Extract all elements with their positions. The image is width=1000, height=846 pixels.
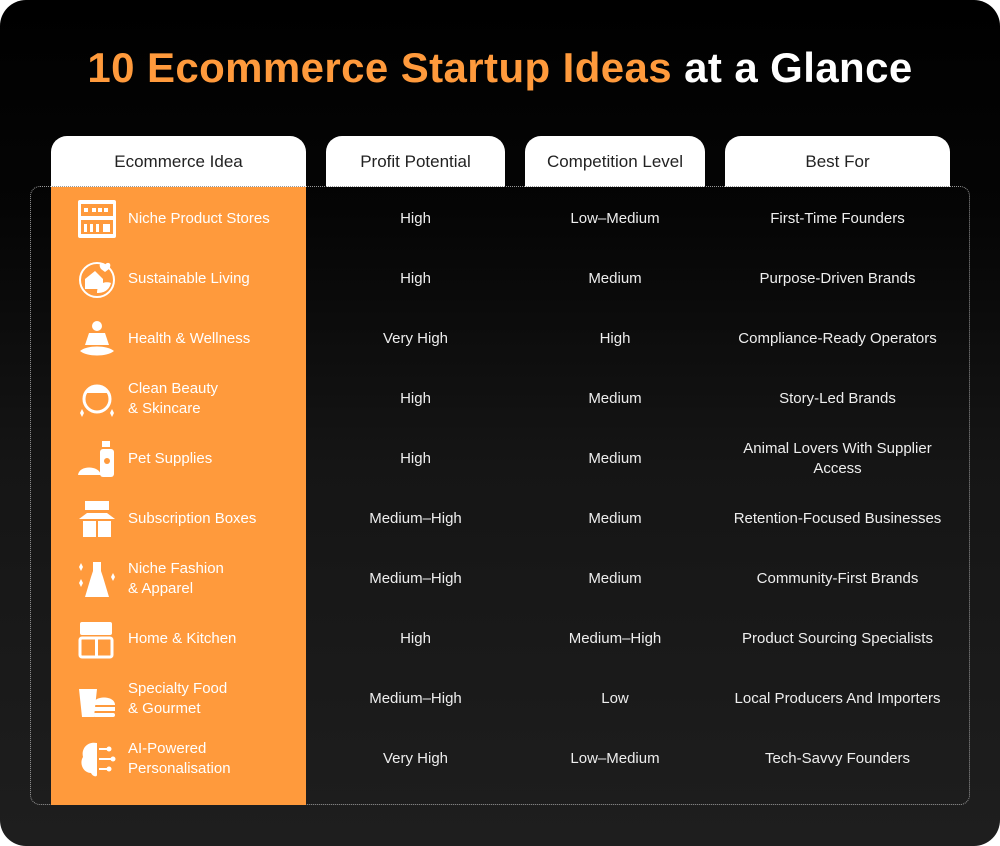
competition: Medium — [588, 450, 642, 467]
row 3 — [80, 321, 937, 356]
best for: Retention-Focused Businesses — [734, 510, 941, 527]
profit: High — [400, 630, 431, 647]
best for — [743, 440, 932, 477]
icon: face skincare — [80, 384, 114, 417]
competition: High — [600, 330, 630, 347]
header: Ecommerce Idea — [51, 136, 306, 187]
best for: Compliance-Ready Operators — [738, 330, 937, 347]
icon: food — [79, 689, 115, 717]
header: Profit Potential: Profit Potential — [360, 152, 471, 170]
competition: Low — [601, 690, 629, 707]
profit: Medium–High — [369, 690, 462, 707]
icon: sustainable home — [79, 262, 115, 298]
profit: Medium–High — [369, 570, 462, 587]
row 4 — [80, 380, 896, 417]
orange idea column — [51, 187, 306, 805]
idea: Personalisation — [128, 760, 231, 777]
profit: Medium–High — [369, 510, 462, 527]
idea: AI-Powered — [128, 740, 206, 757]
idea: Home & Kitchen — [128, 630, 236, 647]
best for: Story-Led Brands — [779, 390, 896, 407]
header: Competition Level — [525, 136, 705, 187]
competition: Medium — [588, 390, 642, 407]
idea: & Gourmet — [128, 700, 201, 717]
best for: Local Producers And Importers — [735, 690, 940, 707]
idea: Niche Product Stores — [128, 210, 270, 227]
idea — [128, 680, 227, 717]
best for: First-Time Founders — [770, 210, 905, 227]
competition: Low–Medium — [570, 750, 660, 767]
idea: & Apparel — [128, 580, 193, 597]
competition: Low–Medium — [570, 210, 660, 227]
row 6 — [79, 501, 941, 537]
icon: shelves — [78, 200, 116, 238]
header: Competition Level: Competition Level — [547, 152, 683, 170]
icon: kitchen — [78, 622, 114, 658]
best for: Purpose-Driven Brands — [760, 270, 915, 287]
idea: Clean Beauty — [128, 380, 218, 397]
profit: High — [400, 210, 431, 227]
row 8 — [78, 622, 933, 658]
row 7 — [79, 560, 918, 597]
idea: & Skincare — [128, 400, 201, 417]
row 1 — [78, 200, 905, 238]
profit: Very High — [383, 750, 448, 767]
icon: meditation — [80, 321, 114, 356]
best for: Product Sourcing Specialists — [742, 630, 933, 647]
competition: Medium — [588, 510, 642, 527]
profit: High — [400, 450, 431, 467]
best for: Community-First Brands — [757, 570, 918, 587]
competition: Medium–High — [569, 630, 661, 647]
idea: Subscription Boxes — [128, 510, 256, 527]
best for: Tech-Savvy Founders — [765, 750, 910, 767]
profit: Very High — [383, 330, 448, 347]
idea: Sustainable Living — [128, 270, 250, 287]
header: Best For: Best For — [805, 152, 870, 170]
profit: High — [400, 390, 431, 407]
table frame — [30, 186, 970, 805]
icon: subscription box — [79, 501, 115, 537]
header: Profit Potential — [326, 136, 505, 187]
idea — [128, 740, 231, 777]
idea: Specialty Food — [128, 680, 227, 697]
header: Best For — [725, 136, 950, 187]
title: 10 Ecommerce Startup Ideas at a Glance — [87, 44, 913, 91]
row 2 — [79, 262, 915, 298]
competition: Medium — [588, 270, 642, 287]
idea: Niche Fashion — [128, 560, 224, 577]
header: Ecommerce Idea: Ecommerce Idea — [114, 152, 243, 170]
icon: dress — [79, 562, 115, 597]
idea — [128, 380, 218, 417]
icon: AI brain — [81, 742, 116, 776]
profit: High — [400, 270, 431, 287]
icon: pet supplies — [78, 441, 114, 477]
idea — [128, 560, 224, 597]
best for: Animal Lovers With Supplier — [743, 440, 932, 457]
row 5 — [78, 440, 932, 477]
competition: Medium — [588, 570, 642, 587]
row 10 — [81, 740, 910, 777]
idea: Pet Supplies — [128, 450, 212, 467]
best for: Access — [813, 460, 862, 477]
row 9 — [79, 680, 940, 717]
idea: Health & Wellness — [128, 330, 250, 347]
